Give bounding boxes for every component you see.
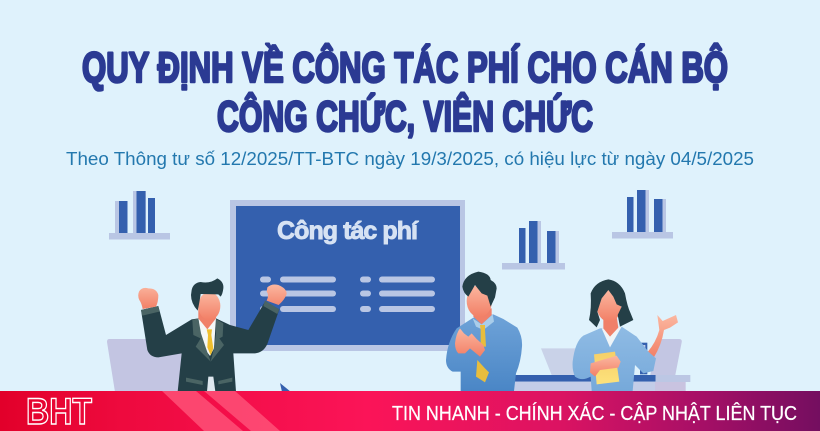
man shirt (198, 318, 216, 356)
woman notebook (594, 352, 619, 384)
figure: woman with notebook (573, 279, 678, 391)
man hair (191, 278, 223, 311)
board list lines (260, 276, 435, 312)
man 2 hands (455, 328, 485, 357)
man neck and face (198, 307, 216, 329)
icon: right bar-chart shelf (612, 190, 673, 238)
man fists (138, 285, 287, 309)
title: CÔNG CHỨC, VIÊN CHỨC (217, 92, 593, 141)
panel: presentation board (230, 200, 465, 351)
woman hair (589, 279, 633, 327)
man lapels (192, 318, 224, 362)
woman top (573, 327, 656, 391)
man 2 neck (473, 308, 492, 324)
man 2 tie (476, 325, 489, 382)
woman hand (590, 356, 621, 377)
title (82, 43, 728, 141)
man pockets and cuffs (141, 301, 279, 385)
logo: BHT: BHT (26, 391, 92, 431)
man 2 face (467, 285, 492, 317)
icon: small blue arrow tip (280, 383, 291, 392)
figure: man in blue shirt clapping (446, 272, 522, 391)
footer band (0, 391, 820, 431)
icon: right laptop and desk (514, 339, 690, 392)
woman neck and face (603, 317, 618, 337)
figure: man in dark suit cheering (138, 278, 287, 392)
woman arm (647, 315, 678, 358)
man 2 hair (462, 272, 497, 307)
band stripes (162, 391, 280, 431)
man jacket (141, 302, 279, 392)
man 2 shirt (446, 314, 522, 391)
icon: left laptop (107, 339, 185, 392)
board heading: Công tác phí (277, 217, 419, 245)
man 2 collar (473, 314, 494, 330)
man tie (207, 329, 213, 355)
icon: left bar-chart shelf (109, 191, 170, 240)
icon: middle bar-chart shelf (502, 221, 565, 270)
subtitle: Theo Thông tư số 12/2025/TT-BTC ngày 19/3/2025, có hiệu lực từ ngày 04/5/2025 (66, 149, 754, 169)
